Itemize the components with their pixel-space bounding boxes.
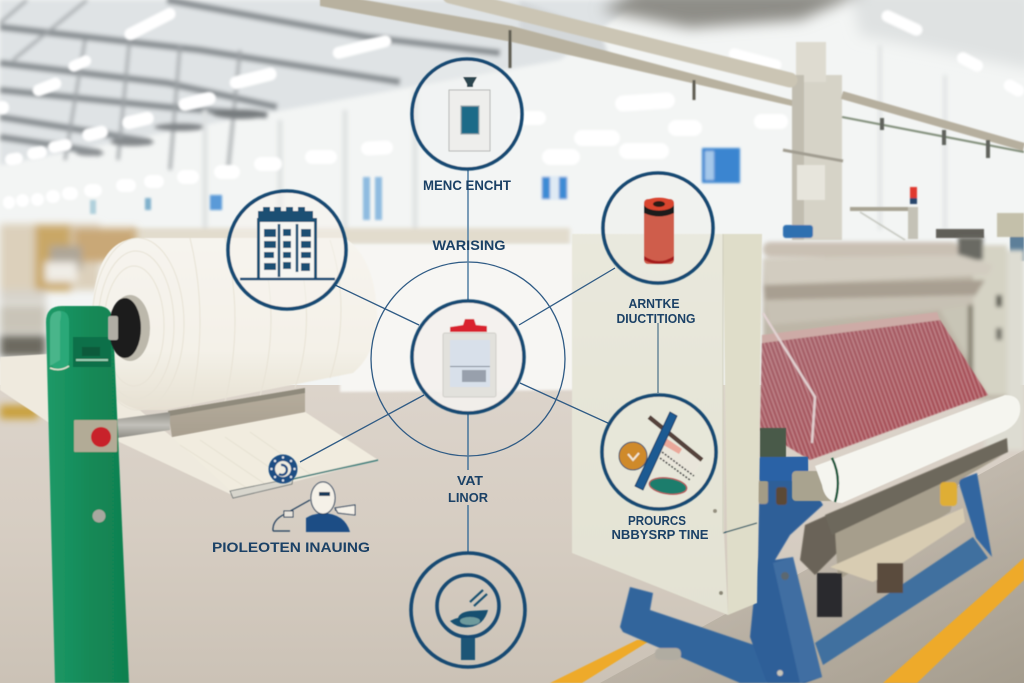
label: VAT: VAT	[457, 473, 483, 488]
label: PROURCS: PROURCS	[628, 513, 686, 528]
label: MENC ENCHT: MENC ENCHT	[423, 178, 512, 193]
label: PIOLEOTEN INAUING: PIOLEOTEN INAUING	[212, 540, 370, 555]
label: NBBYSRP TINE: NBBYSRP TINE	[612, 527, 709, 542]
white fabric behind roll	[340, 245, 575, 392]
node: bearing badge	[268, 454, 298, 484]
label: DIUCTITIONG: DIUCTITIONG	[616, 311, 696, 326]
icon: operator figure	[273, 482, 355, 532]
node: red cylinder	[603, 173, 713, 283]
roll of fabric	[92, 238, 377, 410]
roll support bar	[117, 388, 305, 438]
roll hub	[108, 295, 150, 361]
label: ARNTKE: ARNTKE	[628, 296, 680, 311]
blue frame	[620, 438, 1008, 683]
node: building icon	[228, 191, 346, 309]
node: top panel icon	[412, 59, 522, 169]
floor stripes	[550, 558, 1024, 683]
pallets and stock at far left	[0, 224, 136, 419]
label: WARISING: WARISING	[432, 237, 506, 253]
node: magnifier with teapot	[411, 553, 525, 667]
paper sheet	[0, 354, 378, 498]
red warp threads	[760, 312, 988, 460]
node: tools and badges	[602, 395, 716, 509]
overhead pipes and column	[320, 0, 1024, 261]
label: LINOR: LINOR	[448, 490, 489, 505]
white cloth roller	[760, 395, 1020, 503]
node: central monitor	[412, 301, 524, 413]
upper right ceiling	[600, 0, 1024, 70]
green post	[46, 306, 129, 683]
ceiling lights	[0, 6, 1024, 209]
network connector lines and ring	[300, 170, 658, 553]
signs on wall	[90, 148, 740, 220]
loom machine	[620, 237, 1024, 683]
loom upper frame	[763, 237, 1024, 450]
control cabinet	[572, 234, 762, 615]
